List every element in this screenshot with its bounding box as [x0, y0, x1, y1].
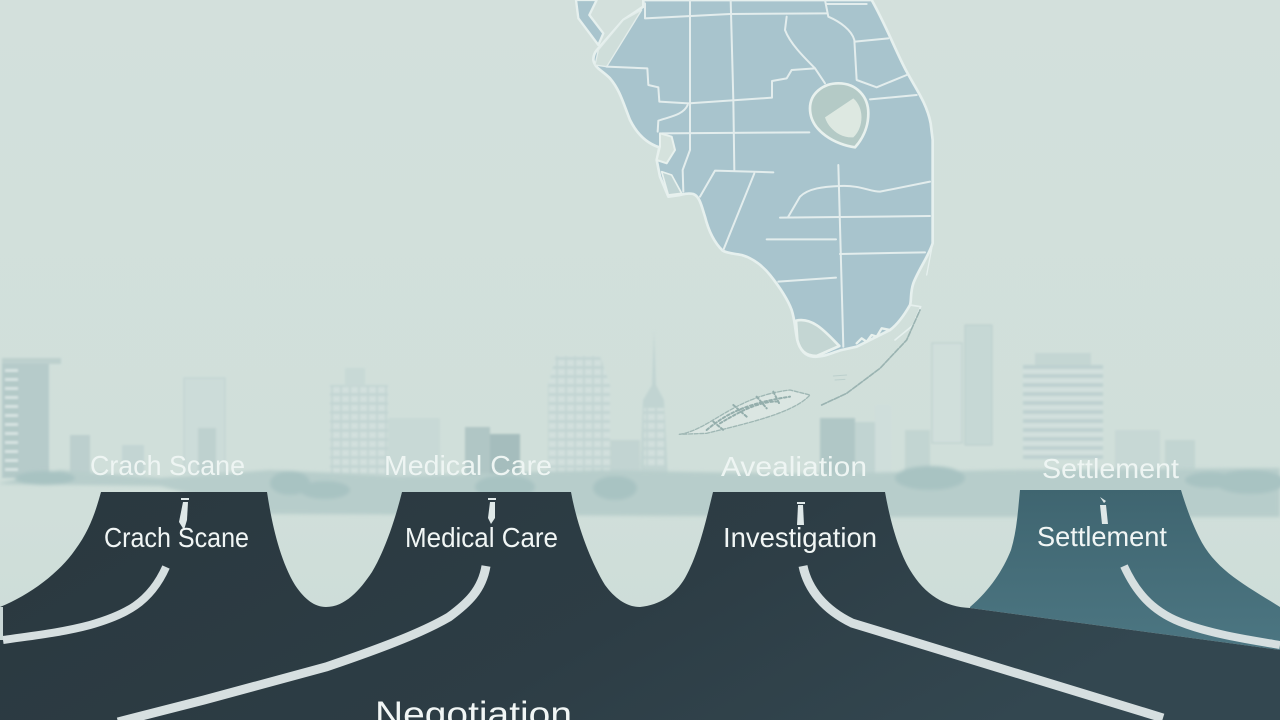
building 6 [1023, 353, 1103, 460]
Lake Okeechobee [810, 83, 868, 147]
bay [595, 10, 642, 67]
trees [15, 466, 1280, 500]
northwest inlet [576, 0, 603, 45]
mid-rise cluster [820, 405, 1195, 478]
pin 3 [797, 502, 805, 525]
pin markers [179, 497, 1108, 530]
label: Medical Care: Medical Care [405, 522, 558, 553]
spire tower [640, 330, 668, 480]
lane line 1 [3, 567, 166, 640]
building 2 [184, 378, 225, 475]
Florida Keys [679, 310, 920, 434]
Charlotte Harbor [657, 133, 675, 163]
label: Medical Care upper: Medical Care [384, 450, 552, 481]
Florida map [576, 0, 933, 434]
shore band [0, 468, 1280, 517]
building 5 [932, 325, 992, 445]
teal settlement road [970, 490, 1280, 650]
pin 4 [1100, 497, 1108, 524]
pin 2 [488, 498, 496, 524]
tree line [0, 466, 1280, 517]
Pine Island [662, 172, 682, 195]
left edge strip [0, 607, 3, 640]
lower step labels [104, 521, 1167, 553]
lane line 3 [803, 566, 1163, 718]
Biscayne coast [857, 328, 890, 343]
label: Settlement upper: Settlement [1042, 453, 1179, 484]
low buildings [70, 427, 640, 480]
label: Crash Scene upper: Crach Scane [90, 450, 245, 481]
building 1 [2, 358, 61, 478]
lane line 2 [118, 566, 486, 720]
label: Investigation: Investigation [723, 522, 877, 553]
label: Investigation upper: Avealiation [721, 451, 867, 482]
dark road shape [0, 492, 1280, 720]
lane line 4 [1124, 566, 1280, 645]
label: Crash Scene: Crach Scane [104, 522, 249, 553]
Cape Sable [796, 320, 839, 356]
road lane lines [3, 566, 1280, 720]
county lines [607, 0, 930, 347]
city skyline [2, 325, 1195, 480]
upper step labels [90, 450, 1179, 484]
land mass [593, 0, 933, 357]
label: Settlement: Settlement [1037, 521, 1167, 552]
building 3 [330, 368, 440, 476]
building 4 [548, 356, 610, 480]
pin 1 [179, 498, 189, 530]
